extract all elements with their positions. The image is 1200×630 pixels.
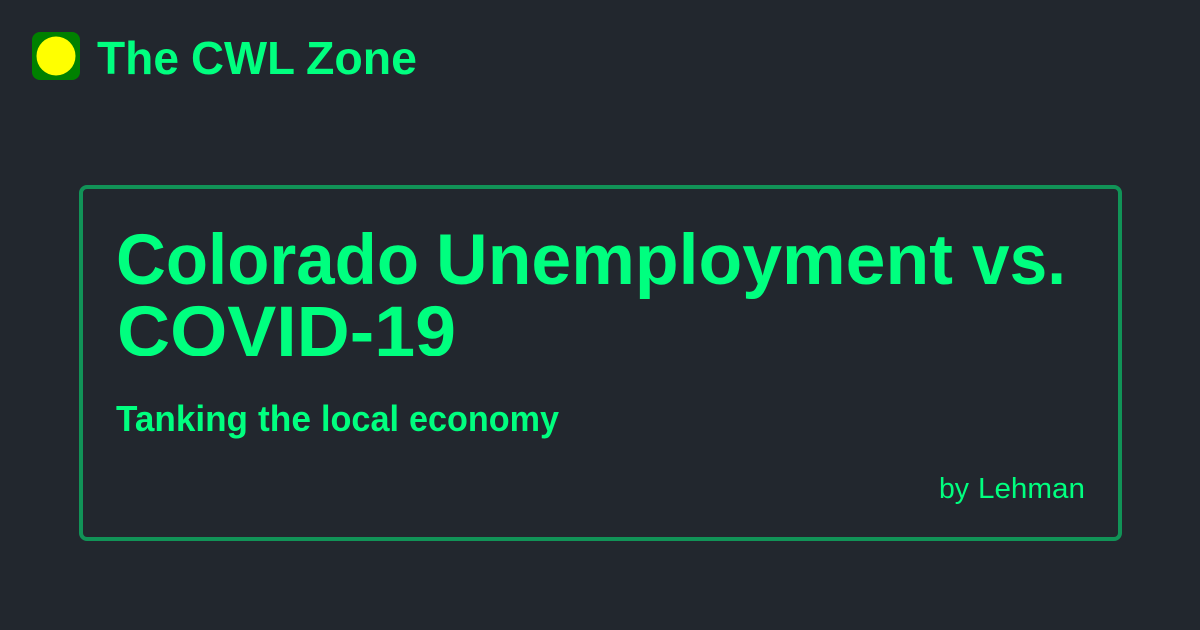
site logo icon — [32, 32, 80, 80]
subtitle: the — [258, 398, 311, 439]
site name: CWL — [191, 32, 295, 84]
title card — [81, 187, 1120, 539]
headline — [118, 232, 1062, 356]
subtitle: economy — [409, 398, 559, 439]
author byline: by — [939, 473, 969, 505]
author byline: Lehman — [978, 473, 1085, 505]
headline: vs. — [972, 221, 1066, 300]
site name: The — [97, 32, 179, 84]
headline: Colorado — [116, 221, 419, 300]
subtitle — [116, 398, 559, 439]
site name: Zone — [306, 32, 417, 84]
headline: Unemployment — [436, 221, 953, 300]
subtitle: local — [321, 398, 399, 439]
headline: COVID-19 — [117, 293, 456, 372]
subtitle: Tanking — [116, 398, 248, 439]
site name — [97, 32, 417, 84]
